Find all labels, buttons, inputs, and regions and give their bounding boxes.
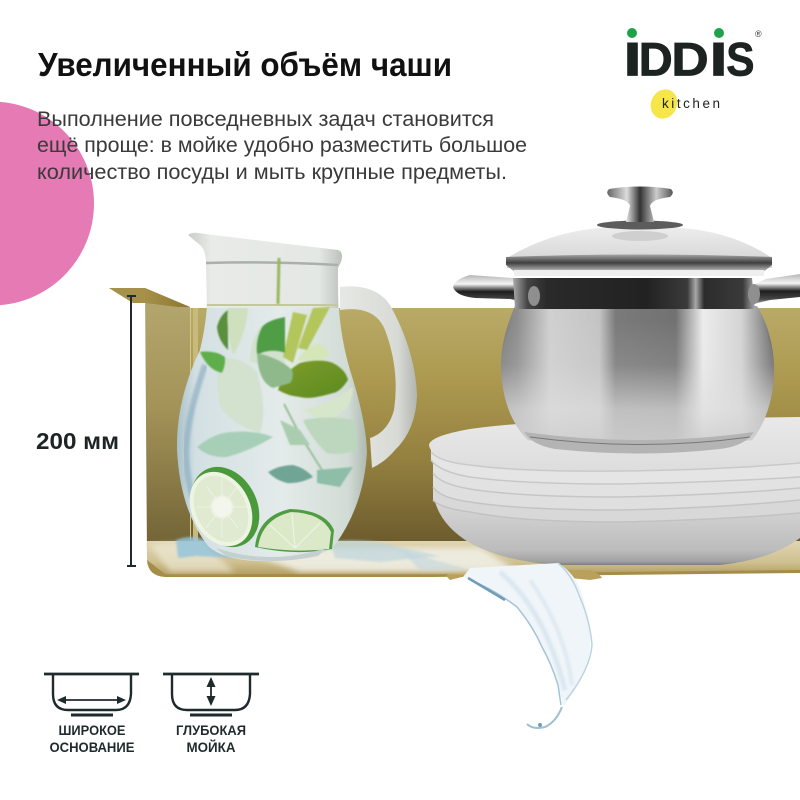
plate 2 bbox=[431, 450, 800, 484]
jug base bbox=[216, 548, 326, 561]
sink floor bbox=[147, 541, 800, 576]
drain lip bbox=[446, 570, 602, 580]
label: deep sink: МОЙКА bbox=[186, 740, 236, 755]
plate bottom bowl bbox=[434, 498, 800, 565]
label: wide base: ШИРОКОЕ bbox=[58, 723, 126, 738]
mint leaves upper bbox=[200, 308, 348, 398]
sink back wall bbox=[189, 308, 800, 541]
plate 5 bbox=[433, 480, 800, 522]
logo: IDDIS kitchen: I bbox=[709, 34, 728, 86]
water splash on floor bbox=[176, 537, 470, 570]
mint stem bbox=[278, 258, 279, 304]
jug neck and rim bbox=[188, 233, 342, 308]
label: wide base: ОСНОВАНИЕ bbox=[50, 740, 134, 755]
jug body glass bbox=[177, 283, 367, 561]
pot body bbox=[501, 306, 774, 448]
label: wide base bbox=[50, 723, 134, 755]
description text: количество посуды и мыть крупные предметы. bbox=[37, 161, 507, 184]
glass lid bbox=[507, 227, 772, 268]
plate 4 bbox=[433, 470, 800, 510]
pot dark band bbox=[513, 278, 755, 309]
logo: IDDIS kitchen bbox=[623, 28, 762, 123]
pot base bbox=[524, 432, 754, 454]
mint leaves lower bbox=[197, 404, 357, 487]
logo: IDDIS kitchen: ® bbox=[755, 29, 762, 39]
pale leaves back bbox=[217, 325, 353, 433]
sink top flange bbox=[109, 288, 190, 307]
logo: IDDIS kitchen: D bbox=[639, 32, 673, 86]
jug contents bbox=[197, 258, 357, 487]
dimension line: 200 mm bbox=[127, 296, 136, 566]
lime wedge sticks bbox=[283, 307, 330, 363]
lime slice small bbox=[255, 509, 334, 552]
description text: Выполнение повседневных задач становится bbox=[37, 108, 494, 131]
description text bbox=[37, 108, 527, 184]
description text: ещё проще: в мойке удобно разместить большое bbox=[37, 134, 527, 157]
top plate bbox=[429, 417, 800, 471]
pot handle left bbox=[453, 275, 540, 305]
water jug bbox=[177, 233, 417, 561]
plate 3 bbox=[433, 460, 800, 497]
lid knob bbox=[597, 186, 683, 241]
floor reflection bbox=[150, 541, 235, 572]
logo: IDDIS kitchen: kitchen bbox=[662, 96, 720, 111]
label: deep sink bbox=[176, 723, 246, 755]
pot rivets bbox=[528, 286, 540, 306]
icon: wide base sink bbox=[44, 674, 139, 715]
lid rim bbox=[506, 254, 772, 273]
sink bowl bbox=[109, 288, 800, 580]
jug left edge shade bbox=[186, 365, 205, 512]
title: Увеличенный объём чаши bbox=[38, 46, 452, 83]
pink circle bbox=[0, 102, 94, 306]
lime slice large bbox=[177, 455, 273, 559]
sink left wall bbox=[145, 288, 190, 556]
water stream bbox=[463, 563, 592, 728]
logo: IDDIS kitchen: S bbox=[726, 35, 755, 86]
dimension label: 200 мм bbox=[36, 428, 119, 454]
pot handle right bbox=[749, 274, 800, 305]
jug handle bbox=[340, 286, 417, 468]
logo: IDDIS kitchen: I bbox=[623, 34, 642, 86]
stack of plates bbox=[429, 417, 800, 565]
label: deep sink: ГЛУБОКАЯ bbox=[176, 723, 246, 738]
logo: IDDIS kitchen: D bbox=[671, 34, 709, 86]
icon: deep sink bbox=[163, 674, 259, 715]
cooking pot bbox=[453, 186, 800, 454]
